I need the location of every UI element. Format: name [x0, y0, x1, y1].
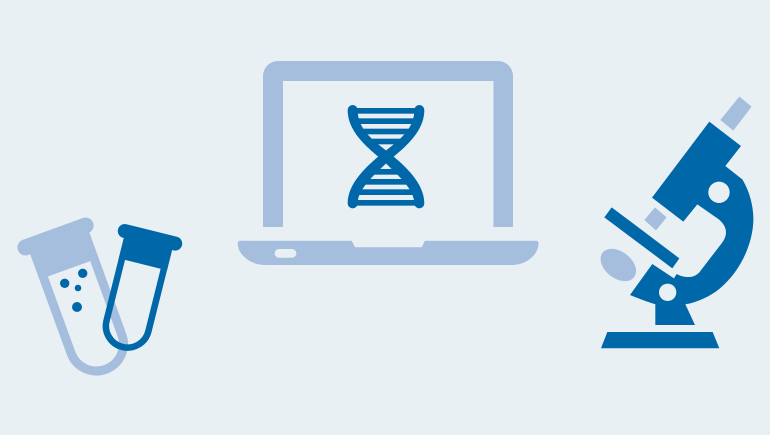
microscope body and arm — [630, 122, 753, 325]
laptop screen frame — [263, 61, 513, 227]
icon: microscope — [594, 97, 753, 348]
mirror — [594, 242, 642, 288]
laptop base — [238, 241, 538, 265]
eyepiece — [720, 97, 752, 131]
dark test tube — [97, 231, 175, 353]
bubbles — [60, 269, 87, 312]
base — [601, 332, 719, 348]
stage — [604, 207, 679, 268]
icon: dna helix — [348, 105, 424, 208]
icon: laptop — [238, 61, 538, 265]
icon: test tubes — [25, 225, 175, 381]
light test tube — [25, 225, 135, 381]
objective lens — [644, 207, 667, 230]
